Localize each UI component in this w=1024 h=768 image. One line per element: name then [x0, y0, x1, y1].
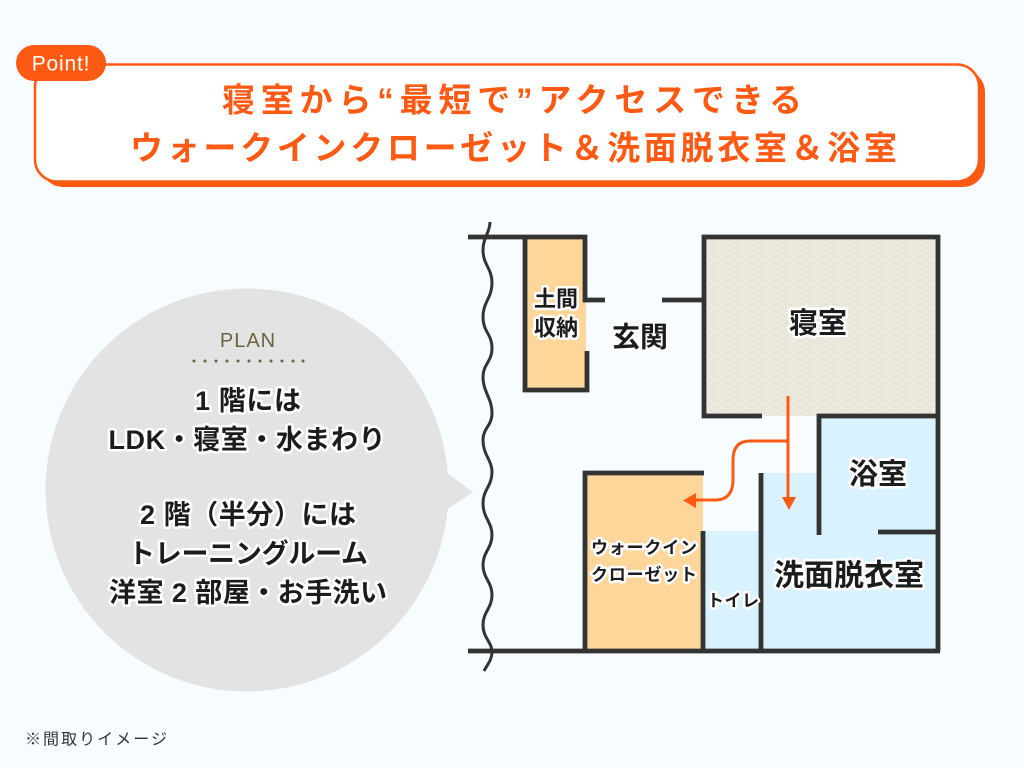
bubble tail [440, 468, 473, 514]
label: earthen storage: 土間 [534, 286, 578, 312]
second floor text: トレーニングルーム [128, 538, 368, 569]
label: toilet: トイレ [707, 592, 759, 610]
floor: earthen storage [526, 238, 586, 390]
footnote: ※間取りイメージ [25, 732, 167, 748]
first floor text: 1 階には [195, 386, 301, 416]
title panel [16, 45, 985, 187]
first floor text: LDK・寝室・水まわり [108, 425, 386, 455]
label: walk-in closet: ウォークイン [591, 538, 697, 558]
floor: toilet [704, 531, 760, 649]
label: bath: 浴室 [849, 458, 907, 491]
label: entrance: 玄関 [612, 322, 668, 352]
floor: bath and washroom [762, 416, 937, 649]
panel shadow [41, 70, 985, 187]
second floor text: 洋室 2 部屋・お手洗い [109, 578, 387, 608]
bubble circle [46, 288, 448, 692]
arrow: to washroom [782, 396, 796, 510]
floor: bedroom [705, 238, 937, 416]
title text line 1: 寝室から“最短で”アクセスできる [222, 82, 802, 118]
label: walk-in closet: クローゼット [591, 564, 697, 584]
panel box [35, 64, 979, 182]
label: bedroom: 寝室 [789, 307, 847, 340]
floor plan [468, 222, 940, 671]
label: walk-in closet [591, 538, 697, 584]
speech bubble: plan summary [46, 288, 473, 692]
floor: walk-in closet [586, 474, 703, 649]
label: earthen storage: 収納 [534, 316, 578, 340]
label: earthen storage [534, 286, 578, 340]
arrow: to walk-in closet [683, 441, 788, 508]
PLAN label: PLAN [220, 330, 276, 352]
wavy cut line [483, 222, 492, 671]
second floor text [109, 500, 387, 608]
walls [468, 237, 940, 651]
badge: Point! [16, 45, 106, 81]
title text line 2: ウォークインクローゼット＆洗面脱衣室＆浴室 [130, 130, 897, 166]
label: washroom: 洗面脱衣室 [774, 560, 924, 592]
badge: Point!: Point! [32, 52, 90, 76]
second floor text: 2 階（半分）には [140, 500, 356, 530]
dotted divider [192, 360, 304, 362]
first floor text [108, 386, 386, 455]
